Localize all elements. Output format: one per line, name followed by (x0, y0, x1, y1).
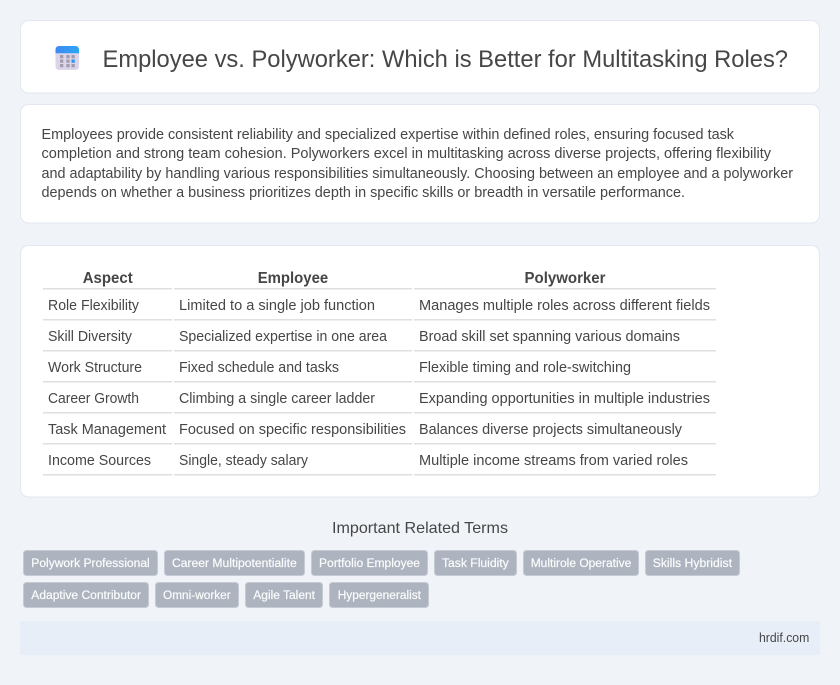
intro panel (20, 104, 820, 223)
row: role flexibility (43, 298, 716, 320)
intro text: depends on whether a business prioritizes depth in specific skills or breadth in versatile performance. (42, 185, 685, 201)
tag: Adaptive Contributor (24, 582, 148, 608)
row: task management (43, 422, 716, 444)
row: work structure: Work Structure (48, 360, 142, 376)
comparison table panel (20, 246, 820, 497)
table header row (43, 270, 716, 290)
tag: Multirole Operative: Multirole Operative (531, 556, 631, 570)
table header row: Aspect (83, 270, 133, 287)
row: skill diversity: Specialized expertise in one area (179, 329, 387, 345)
tag: Portfolio Employee: Portfolio Employee (319, 556, 420, 570)
row: work structure: Flexible timing and role-switching (419, 360, 631, 376)
tag: Omni-worker (156, 582, 238, 608)
header card (20, 20, 820, 93)
tag: Career Multipotentialite: Career Multipotentialite (172, 556, 297, 570)
tag: Multirole Operative (524, 550, 638, 576)
tag: Portfolio Employee (312, 550, 428, 576)
tag: Skills Hybridist (646, 550, 740, 576)
row: skill diversity: Skill Diversity (48, 329, 133, 345)
table card (20, 246, 820, 497)
row: income sources (43, 453, 716, 476)
row: work structure: Fixed schedule and tasks (179, 360, 339, 376)
tag: Omni-worker: Omni-worker (163, 588, 231, 602)
header panel (20, 20, 820, 93)
tag: Career Multipotentialite (164, 550, 304, 576)
tag: Hypergeneralist: Hypergeneralist (338, 588, 422, 602)
row: career growth: Expanding opportunities in multiple industries (419, 391, 710, 407)
tag: Skills Hybridist: Skills Hybridist (653, 556, 733, 570)
intro text (42, 127, 793, 201)
row: skill diversity: Broad skill set spanning various domains (419, 329, 680, 345)
tag: Hypergeneralist (330, 582, 428, 608)
row: career growth: Climbing a single career ladder (179, 391, 375, 407)
intro text: Employees provide consistent reliability and specialized expertise within defined roles, ensuring focused task (42, 127, 735, 143)
row: role flexibility: Manages multiple roles across different fields (419, 298, 710, 314)
table header row: Polyworker (524, 270, 606, 287)
row: career growth: Career Growth (48, 391, 139, 407)
title: Employee vs. Polyworker: Which is Better for Multitasking Roles? (102, 46, 788, 73)
row: role flexibility: Role Flexibility (48, 298, 140, 314)
row: task management: Balances diverse projects simultaneously (419, 422, 683, 438)
row: role flexibility: Limited to a single job function (179, 298, 375, 314)
row: income sources: Single, steady salary (179, 453, 309, 469)
row: career growth (43, 391, 716, 414)
row: work structure (43, 360, 716, 382)
tag: Polywork Professional (24, 550, 158, 576)
row: skill diversity (43, 329, 716, 352)
icon: calendar (56, 46, 79, 70)
related term tags (24, 550, 740, 608)
tag: Agile Talent: Agile Talent (253, 588, 316, 602)
footer source: hrdif.com (759, 630, 809, 645)
intro card (20, 104, 820, 223)
row: income sources: Multiple income streams from varied roles (419, 453, 688, 469)
tag: Task Fluidity (434, 550, 516, 576)
footer bar (20, 621, 820, 655)
table header row: Employee (258, 270, 328, 287)
intro text: completion and strong team cohesion. Polyworkers excel in multitasking across diverse projects, offering flexibility (42, 146, 772, 162)
tag: Task Fluidity: Task Fluidity (442, 556, 509, 570)
intro text: and adaptability by handling various responsibilities simultaneously. Choosing between an employee and a polyworker (42, 166, 793, 182)
row: income sources: Income Sources (48, 453, 151, 469)
tag: Adaptive Contributor: Adaptive Contributor (31, 588, 141, 602)
related terms heading: Important Related Terms (332, 520, 508, 537)
row: task management: Task Management (48, 422, 166, 438)
tag: Polywork Professional: Polywork Professional (31, 556, 150, 570)
row: task management: Focused on specific responsibilities (179, 422, 406, 438)
tag: Agile Talent (246, 582, 322, 608)
